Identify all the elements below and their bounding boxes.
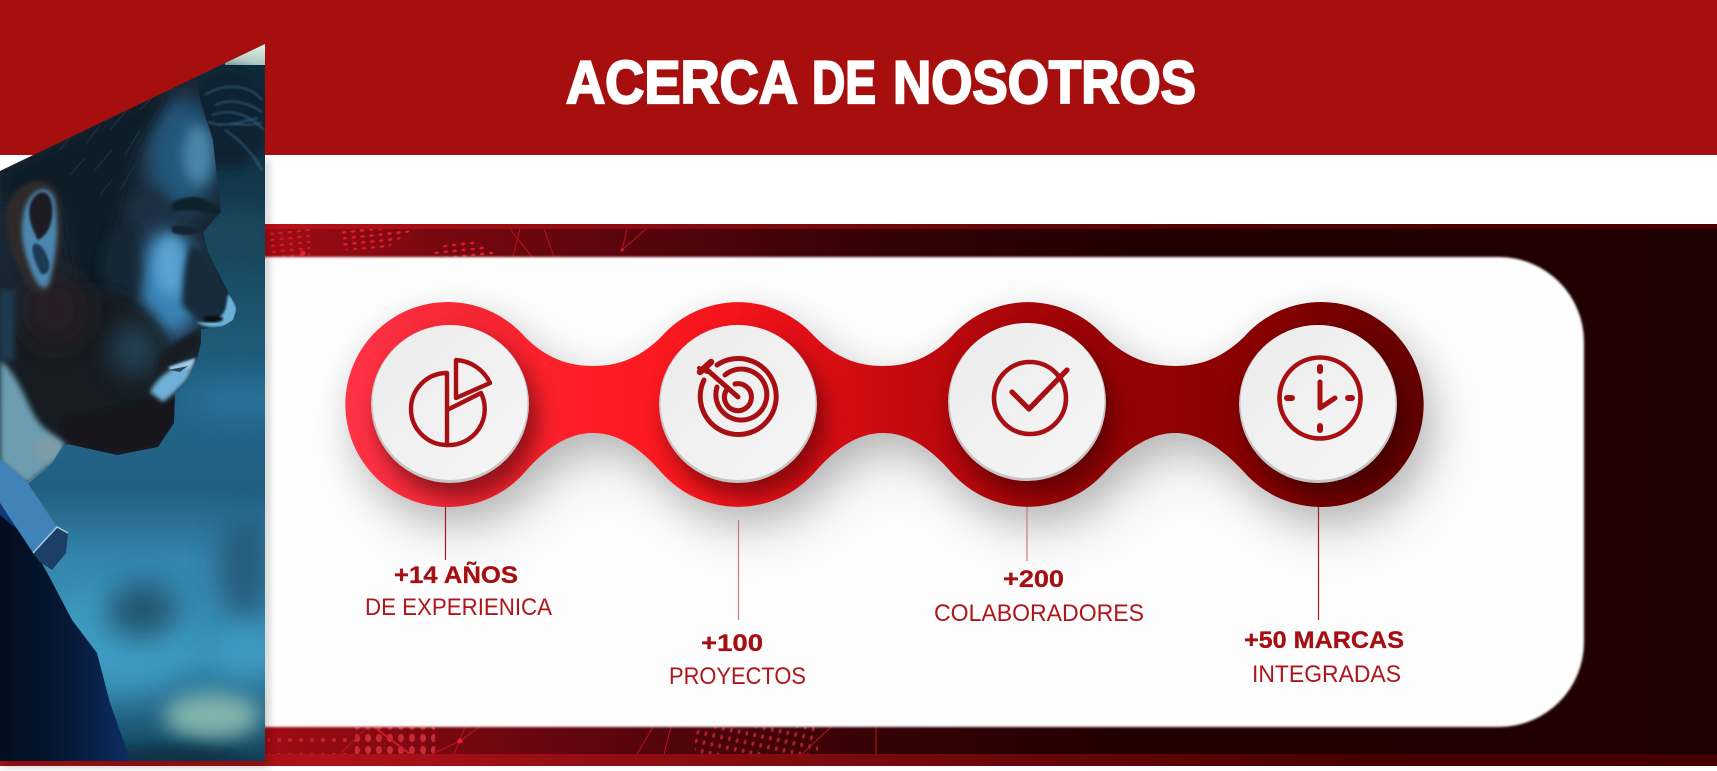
hair at the back of the crown [198,59,265,170]
forehead light [146,97,218,213]
band bottom stripe [0,754,1717,766]
title [566,49,1196,116]
chain red gradient body [345,302,1424,507]
title: ACERCA [566,49,798,116]
label: collaborators [934,566,1144,627]
photo shadow [4,160,269,767]
jacket [0,505,132,765]
band top stripe [240,224,1717,229]
back of head shadow [0,290,14,360]
nostril [203,316,223,322]
temple shade [126,190,174,234]
label: collaborators: +200 [1003,566,1064,593]
leader line 1 [444,507,446,560]
shirt [0,503,11,520]
panel: dark red band with white card [0,224,1717,766]
chain drop shadow [353,318,1432,523]
label: projects: PROYECTOS [669,663,806,690]
nose tip highlight [196,294,237,327]
step 1 disc and icon [371,325,529,483]
chain soft shadow [359,330,1438,535]
label: projects [669,630,806,690]
eyebrow [172,197,222,214]
leader line 4 [1318,507,1320,620]
white card [200,257,1584,727]
photo: man in profile [0,44,265,761]
step chain infographic [345,302,1438,535]
eye [172,225,200,235]
ear [7,181,61,294]
label: brands: +50 MARCAS [1244,627,1404,654]
icon: pie chart [411,360,490,445]
label: brands [1244,627,1404,688]
step 4 disc and icon [1239,325,1397,483]
backdrop blurred lights [68,44,265,761]
photo backdrop [0,40,265,765]
icon: clock [1280,358,1360,438]
band top texture [268,229,646,257]
label: years of experience: +14 AÑOS [394,561,518,589]
header bar [0,0,1717,155]
hair side [0,85,175,300]
icon: check circle [994,362,1067,434]
title: DE [812,49,876,116]
back of neck light [0,360,66,484]
icon: target [699,359,776,435]
label: projects: +100 [701,630,763,657]
step 3 disc and icon [948,323,1106,481]
leader line 2 [738,520,740,620]
moustache [158,330,201,374]
white notch under header [0,155,33,171]
cheek shadow [102,226,142,314]
title: NOSOTROS [893,49,1196,116]
band background [240,224,1717,754]
chin light and lips [150,360,196,402]
neck [28,446,63,484]
step 2 disc and icon [659,325,817,483]
disc shadows on chain [378,336,1406,498]
shirt collar [0,459,68,575]
beard [6,288,174,452]
cheek light [134,231,202,339]
band bottom texture [268,727,876,754]
label: years of experience: DE EXPERIENICA [365,594,552,621]
label: years of experience [365,561,552,621]
label: collaborators: COLABORADORES [934,600,1144,627]
hair strands [60,98,152,195]
shaded nose side [178,244,226,322]
label: brands: INTEGRADAS [1252,661,1401,688]
face silhouette and shading [0,60,240,490]
leader line 3 [1026,507,1028,561]
